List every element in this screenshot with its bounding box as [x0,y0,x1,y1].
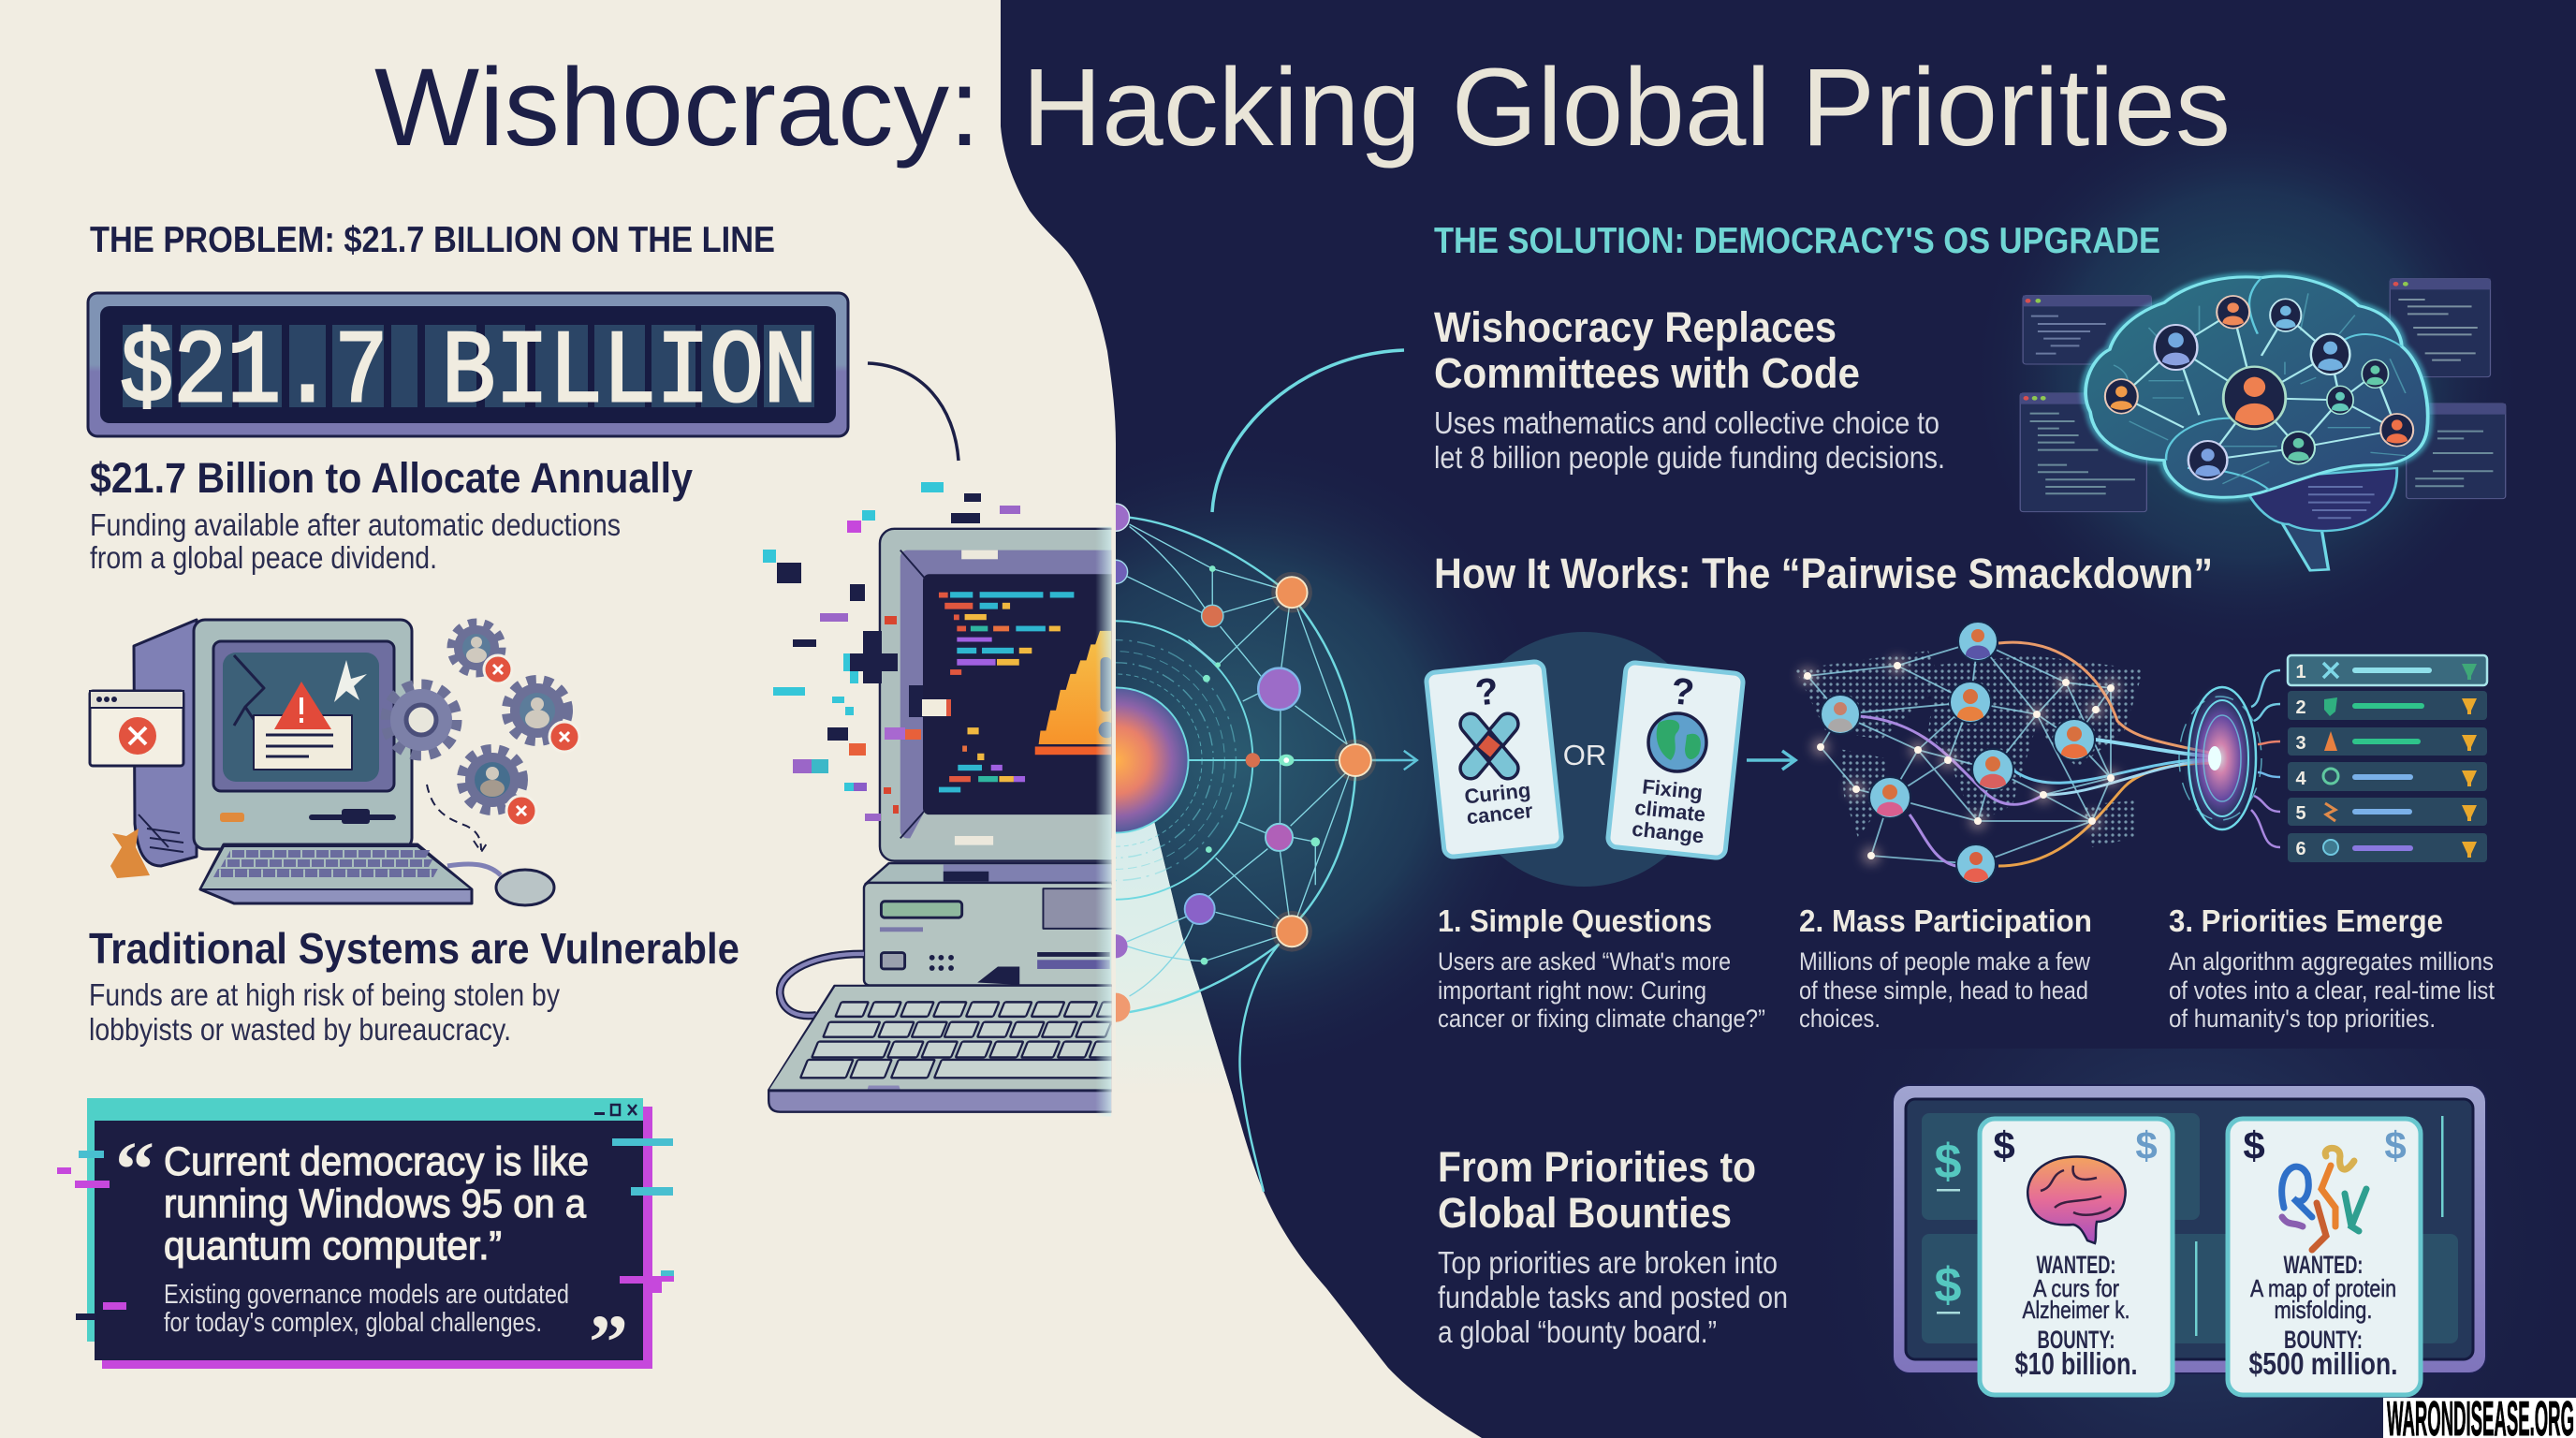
title: Wishocracy: [374,46,980,169]
cerebrum [2086,276,2428,497]
computer base [863,882,1112,987]
rank 4: 4 [2295,769,2306,789]
rank 3: 3 [2295,733,2306,754]
star node centres [1804,662,2115,859]
icon: failing gears [386,623,579,852]
thin connecting lines [1127,524,1350,996]
streams from portal to ranked list [2251,670,2280,847]
text block: wishocracy replaces committees: let 8 billion people guide funding decisions. [1434,440,1945,475]
bounty card: protein misfolding: A map of protein [2250,1274,2396,1302]
bounty card: protein misfolding [2228,1119,2421,1395]
rank 3 [2288,727,2487,756]
step 3 text: of humanity's top priorities. [2169,1005,2436,1033]
text block: traditional systems: Funds are at high risk of being stolen by [89,977,560,1012]
rank 5 [2288,798,2487,826]
card: fixing climate change [1607,662,1744,858]
bounty card: alzheimer's: $10 billion. [2014,1346,2138,1381]
callout: glitched quote window: running Windows 95 on a [164,1181,586,1226]
text block: traditional systems: Traditional Systems are Vulnerable [89,924,739,973]
bounty card: protein misfolding: WANTED: [2284,1251,2363,1279]
card: fixing climate change: climate [1633,796,1706,827]
bounty card: protein misfolding: BOUNTY: [2284,1326,2363,1354]
rank 6: 6 [2295,839,2306,859]
rank 4 [2288,762,2487,791]
step 1 text [1438,903,1765,1033]
rank 6 [2288,833,2487,862]
brain surface texture [2114,293,2406,484]
funnel streams to portal [1858,642,2214,866]
bounty card: protein misfolding: $ [2384,1123,2407,1167]
cerebellum and stem [2281,521,2329,570]
title [374,46,2231,169]
heading: the problem: THE PROBLEM: $21.7 BILLION ON THE LINE [90,220,775,260]
text block: wishocracy replaces committees: Wishocracy Replaces [1434,303,1837,351]
dark solution panel [1001,0,2576,1438]
glow behind network [1116,412,1573,1105]
icon: crossed bandages [1456,710,1522,783]
rank 2: 2 [2295,697,2306,718]
arrow to network map [1747,751,1795,770]
card: curing cancer: Curing [1463,778,1531,808]
heading: how it works: How It Works: The “Pairwise Smackdown” [1434,550,2213,597]
bounty card: alzheimer's: BOUNTY: [2037,1326,2115,1354]
text block: traditional systems [89,924,739,1047]
long top arc leading to text [1212,350,1404,512]
bounty board: $ [1935,1258,1962,1313]
star nodes [1799,657,2119,864]
icon: networked brain with code windows [2020,276,2506,570]
text block: wishocracy replaces committees: Committees with Code [1434,349,1860,397]
bounty card: alzheimer's [1980,1119,2173,1395]
step 1 text: Users are asked “What's more [1438,947,1731,976]
title: Hacking Global Priorities [1022,46,2231,169]
bounty card: alzheimer's: A curs for [2033,1274,2119,1302]
text block: from priorities to bounties: From Priorities to [1438,1143,1756,1191]
text block: traditional systems: lobbyists or wasted by bureaucracy. [89,1012,511,1047]
avatars [1821,622,2095,884]
bounty card: alzheimer's: WANTED: [2037,1251,2115,1279]
text block: from priorities to bounties [1438,1143,1788,1349]
monitor stand [865,863,1138,884]
bounty card: alzheimer's: Alzheimer k. [2022,1296,2130,1324]
card: curing cancer [1426,661,1562,858]
text block: $21.7 billion to allocate: from a global peace dividend. [90,540,437,575]
pale wedge below network core [1116,712,1233,1096]
rank 1: 1 [2295,662,2306,682]
step 2 text [1799,903,2092,1033]
step 1 text: cancer or fixing climate change?” [1438,1005,1765,1033]
step 2 text: of these simple, head to head [1799,976,2088,1005]
icon: glitching retro computer [768,526,1112,1116]
monitor case [878,528,1112,862]
text block: from priorities to bounties: Top priorities are broken into [1438,1245,1778,1280]
card: curing cancer: cancer [1466,799,1534,829]
text block: from priorities to bounties: fundable tasks and posted on [1438,1280,1788,1314]
bounty board [1893,1085,2486,1395]
connector arc from counter to computer [868,363,959,461]
bounty board: $ [1935,1135,1962,1189]
people avatars [2105,296,2413,479]
bounty card: protein misfolding: $500 million. [2248,1346,2398,1381]
heading: the solution: THE SOLUTION: DEMOCRACY'S OS UPGRADE [1434,221,2160,261]
callout: glitched quote window: Current democracy is like [164,1139,589,1184]
pairwise question cards: OR [1563,739,1606,771]
step 1 text: important right now: Curing [1438,976,1706,1005]
step 3 text [2169,903,2495,1033]
pairwise question cards [1426,632,1744,887]
neural links [2121,312,2397,461]
ranked priorities list [2288,655,2487,862]
concentric rings [1116,620,1254,901]
text block: wishocracy replaces committees [1434,303,1945,475]
connection lines [1808,641,2111,864]
icon: error window [90,691,183,766]
callout: glitched quote window: “ [115,1126,154,1213]
brain glow outline [2086,276,2428,497]
glow behind brain [1956,84,2537,665]
warning triangle [1039,631,1112,744]
step 3 text: An algorithm aggregates millions [2169,947,2494,976]
step 3 text: 3. Priorities Emerge [2169,903,2443,938]
keyboard [768,985,1112,1113]
step 2 text: Millions of people make a few [1799,947,2090,976]
step 2 text: choices. [1799,1005,1881,1033]
counter: $21.7 billion display: $21.7 BILLION [120,315,817,433]
network nodes [1101,504,1376,1022]
icon: globe [1648,713,1706,771]
rank 2 [2288,691,2487,720]
icon: broken retro computer [110,620,554,905]
rank 1 [2288,655,2487,685]
card: fixing climate change: ? [1669,670,1696,714]
card: fixing climate change: change [1631,817,1705,848]
step 3 text: of votes into a clear, real-time list [2169,976,2495,1005]
world network map [1795,622,2214,884]
bounty card: protein misfolding: misfolding. [2275,1296,2372,1324]
callout: glitched quote window: ” [589,1299,628,1387]
thick outer arcs [1130,518,1417,1192]
callout: glitched quote window [57,1098,674,1387]
card: fixing climate change: Fixing [1641,775,1704,804]
dotted map [1795,651,2144,847]
step 1 text: 1. Simple Questions [1438,903,1712,938]
callout: glitched quote window: for today's complex, global challenges. [164,1308,542,1338]
pixel debris flying off the computer [763,482,1020,821]
text block: $21.7 billion to allocate: $21.7 Billion to Allocate Annually [90,454,693,502]
bounty card: alzheimer's: $ [2135,1123,2158,1167]
rank 5: 5 [2295,803,2306,824]
code windows [2020,279,2506,512]
glowing core [1116,688,1187,832]
text block: wishocracy replaces committees: Uses mathematics and collective choice to [1434,405,1939,440]
network globe [1116,503,1419,1193]
code lines [939,592,1074,792]
glow behind bounty board [1769,1049,2576,1438]
callout: glitched quote window: quantum computer.” [164,1224,502,1269]
bounty card: alzheimer's: $ [1993,1123,2015,1167]
callout: glitched quote window: Existing governance models are outdated [164,1280,569,1310]
text block: from priorities to bounties: Global Bounties [1438,1189,1732,1237]
text block: $21.7 billion to allocate: Funding available after automatic deductions [90,507,621,542]
text block: $21.7 billion to allocate [90,454,693,575]
text block: from priorities to bounties: a global “bounty board.” [1438,1314,1717,1349]
card: curing cancer: ? [1473,670,1500,714]
priority portal [2179,683,2261,833]
step 2 text: 2. Mass Participation [1799,903,2092,938]
bounty card: protein misfolding: $ [2243,1123,2265,1167]
